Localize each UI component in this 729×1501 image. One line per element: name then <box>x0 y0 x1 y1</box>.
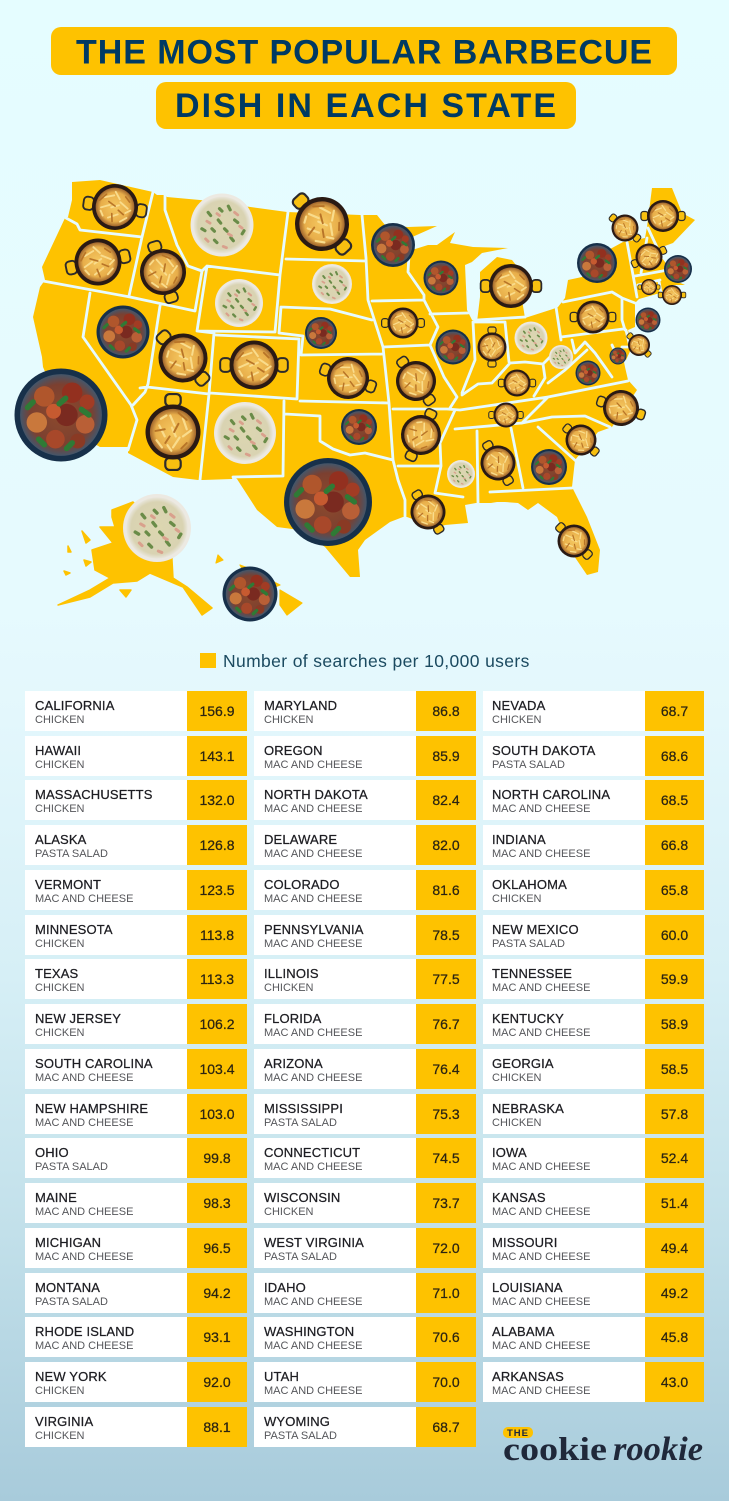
row: South Carolina: 103.4 <box>199 1061 235 1077</box>
row: Arizona <box>254 1049 476 1089</box>
row: Washington <box>254 1317 476 1357</box>
row: Mississippi: 75.3 <box>432 1106 460 1122</box>
row: Maine: MAINE <box>35 1190 77 1205</box>
logo: The Cookie Rookie: rookie <box>613 1431 703 1468</box>
row: Georgia: CHICKEN <box>492 1072 542 1084</box>
logo: The Cookie Rookie: THE <box>507 1428 528 1439</box>
row: New Mexico <box>483 915 704 955</box>
row: Indiana <box>483 825 704 865</box>
row: Michigan: MAC AND CHEESE <box>35 1251 133 1263</box>
row: Nebraska: 57.8 <box>661 1106 688 1122</box>
row: South Dakota: 68.6 <box>661 748 688 764</box>
row: Illinois <box>254 959 476 999</box>
row: Nebraska: CHICKEN <box>492 1117 542 1129</box>
row: Vermont: VERMONT <box>35 877 101 892</box>
row: Idaho: MAC AND CHEESE <box>264 1296 362 1308</box>
dish: Delaware mac and cheese <box>620 326 658 364</box>
dish: Idaho mac and cheese <box>131 235 195 309</box>
row: Alabama: 45.8 <box>661 1329 688 1345</box>
row: Indiana: 66.8 <box>661 837 688 853</box>
row: Ohio: PASTA SALAD <box>35 1161 108 1173</box>
dish: Indiana mac and cheese <box>478 327 506 367</box>
row: Hawaii: 143.1 <box>199 748 235 764</box>
row: Oregon: MAC AND CHEESE <box>264 759 362 771</box>
dish: Illinois chicken <box>436 330 470 364</box>
dish: Nebraska chicken <box>305 317 337 349</box>
row: Pennsylvania: 78.5 <box>432 927 460 943</box>
map: Alaska <box>58 502 212 615</box>
dish: New Jersey chicken <box>636 308 660 332</box>
dish: West Virginia pasta salad <box>549 345 573 369</box>
title line 2: DISH IN EACH STATE <box>175 87 556 125</box>
row: West Virginia: 72.0 <box>432 1240 460 1256</box>
row: Idaho: IDAHO <box>264 1280 306 1295</box>
row: Kansas: KANSAS <box>492 1190 546 1205</box>
row: Hawaii: CHICKEN <box>35 759 85 771</box>
row: West Virginia: PASTA SALAD <box>264 1251 337 1263</box>
row: Washington: WASHINGTON <box>264 1324 354 1339</box>
row: Wisconsin: CHICKEN <box>264 1206 314 1218</box>
row: Connecticut: MAC AND CHEESE <box>264 1161 362 1173</box>
data table column 3 <box>483 691 704 1402</box>
row: North Carolina: MAC AND CHEESE <box>492 803 590 815</box>
row: Vermont: MAC AND CHEESE <box>35 893 133 905</box>
row: Oregon <box>254 736 476 776</box>
row: Massachusetts: CHICKEN <box>35 803 85 815</box>
row: Rhode Island: 93.1 <box>203 1329 231 1345</box>
row: New Hampshire: 103.0 <box>199 1106 235 1122</box>
row: Rhode Island: RHODE ISLAND <box>35 1324 134 1339</box>
row: Kansas: 51.4 <box>661 1195 688 1211</box>
dish: Michigan mac and cheese <box>481 264 541 308</box>
row: Wyoming: 68.7 <box>432 1419 460 1435</box>
row: Tennessee <box>483 959 704 999</box>
row: South Dakota: SOUTH DAKOTA <box>492 743 595 758</box>
row: Kentucky <box>483 1004 704 1044</box>
row: Connecticut: 74.5 <box>432 1150 460 1166</box>
dish: Arizona mac and cheese <box>146 394 200 470</box>
row: Delaware: 82.0 <box>432 837 460 853</box>
row: Alaska: 126.8 <box>199 837 235 853</box>
dish: Oklahoma chicken <box>341 409 377 445</box>
row: Oklahoma: CHICKEN <box>492 893 542 905</box>
dish: Maryland chicken <box>610 348 626 364</box>
map and title graphic <box>14 27 695 622</box>
row: Nebraska <box>483 1094 704 1134</box>
row: Maine <box>25 1183 247 1223</box>
dish: New York chicken <box>577 243 617 283</box>
row: South Carolina: SOUTH CAROLINA <box>35 1056 153 1071</box>
row: Massachusetts <box>25 780 247 820</box>
row: Maryland: CHICKEN <box>264 714 314 726</box>
row: Vermont <box>25 870 247 910</box>
row: Wyoming: WYOMING <box>264 1414 330 1429</box>
row: Washington: MAC AND CHEESE <box>264 1340 362 1352</box>
row: Virginia <box>25 1407 247 1447</box>
row: Wisconsin: WISCONSIN <box>264 1190 340 1205</box>
dish: Tennessee mac and cheese <box>489 402 523 428</box>
row: Florida: FLORIDA <box>264 1011 321 1026</box>
row: Kentucky: KENTUCKY <box>492 1011 564 1026</box>
dish: Maine mac and cheese <box>641 200 685 232</box>
dish: Ohio pasta salad <box>514 322 548 354</box>
dish: Hawaii chicken <box>222 566 278 622</box>
dish: Alaska pasta salad <box>123 494 191 562</box>
row: Tennessee: TENNESSEE <box>492 966 572 981</box>
row: Louisiana: LOUISIANA <box>492 1280 563 1295</box>
row: Michigan <box>25 1228 247 1268</box>
row: Illinois: ILLINOIS <box>264 966 319 981</box>
row: Wyoming: PASTA SALAD <box>264 1430 337 1442</box>
row: New Jersey: 106.2 <box>199 1016 235 1032</box>
dish: Connecticut mac and cheese <box>638 279 660 295</box>
row: Utah <box>254 1362 476 1402</box>
dish: Wyoming pasta salad <box>215 279 263 327</box>
row: Wisconsin <box>254 1183 476 1223</box>
row: Idaho <box>254 1273 476 1313</box>
row: Maryland: MARYLAND <box>264 698 337 713</box>
row: California: 156.9 <box>199 703 235 719</box>
row: Nebraska: NEBRASKA <box>492 1101 564 1116</box>
row: Kansas <box>483 1183 704 1223</box>
dish: Utah mac and cheese <box>142 317 224 399</box>
row: Nevada: NEVADA <box>492 698 545 713</box>
row: South Carolina: MAC AND CHEESE <box>35 1072 133 1084</box>
row: Missouri: 49.4 <box>661 1240 688 1256</box>
row: Wyoming <box>254 1407 476 1447</box>
row: Rhode Island: MAC AND CHEESE <box>35 1340 133 1352</box>
row: Colorado <box>254 870 476 910</box>
map: contiguous US silhouette with state borders <box>33 180 695 577</box>
dish: Massachusetts chicken <box>664 255 692 283</box>
dish: Pennsylvania mac and cheese <box>570 300 616 334</box>
dish: Kansas mac and cheese <box>314 348 382 408</box>
row: Maine: 98.3 <box>203 1195 231 1211</box>
row: North Carolina: NORTH CAROLINA <box>492 787 610 802</box>
row: New Mexico: 60.0 <box>661 927 688 943</box>
row: Utah: MAC AND CHEESE <box>264 1385 362 1397</box>
row: Indiana: MAC AND CHEESE <box>492 848 590 860</box>
row: Iowa: IOWA <box>492 1145 527 1160</box>
row: Maryland <box>254 691 476 731</box>
dish: Virginia chicken <box>576 360 600 386</box>
logo: The Cookie Rookie: cookie <box>503 1432 607 1468</box>
row: West Virginia <box>254 1228 476 1268</box>
row: Missouri: MAC AND CHEESE <box>492 1251 590 1263</box>
row: North Dakota <box>254 780 476 820</box>
row: New Jersey <box>25 1004 247 1044</box>
title line 1: THE MOST POPULAR BARBECUE <box>76 34 652 72</box>
row: Washington: 70.6 <box>432 1329 460 1345</box>
row: Arkansas <box>483 1362 704 1402</box>
row: Kansas: MAC AND CHEESE <box>492 1206 590 1218</box>
row: Alabama: ALABAMA <box>492 1324 554 1339</box>
dish: Arkansas mac and cheese <box>391 402 451 468</box>
row: New Hampshire <box>25 1094 247 1134</box>
dish: South Carolina mac and cheese <box>555 414 607 466</box>
dish: Missouri mac and cheese <box>384 347 448 415</box>
row: Minnesota: CHICKEN <box>35 938 85 950</box>
dish: North Dakota mac and cheese <box>277 178 367 270</box>
dish: Alabama mac and cheese <box>471 433 525 493</box>
row: Missouri <box>483 1228 704 1268</box>
dish: New Hampshire mac and cheese <box>626 237 672 277</box>
row: Georgia: GEORGIA <box>492 1056 554 1071</box>
data table column 2 <box>254 691 476 1447</box>
row: Nevada <box>483 691 704 731</box>
row: Delaware: DELAWARE <box>264 832 337 847</box>
dish: Texas chicken <box>284 458 372 546</box>
data table column 1 <box>25 691 247 1447</box>
row: Pennsylvania <box>254 915 476 955</box>
row: South Dakota: PASTA SALAD <box>492 759 565 771</box>
dish: Kentucky mac and cheese <box>498 370 536 396</box>
dish: California chicken <box>14 368 107 462</box>
row: Colorado: COLORADO <box>264 877 340 892</box>
row: Montana: PASTA SALAD <box>35 1296 108 1308</box>
row: Hawaii <box>25 736 247 776</box>
row: South Dakota <box>483 736 704 776</box>
row: Connecticut <box>254 1138 476 1178</box>
dish: Colorado mac and cheese <box>220 340 288 390</box>
dish: Washington mac and cheese <box>80 180 150 234</box>
row: Ohio <box>25 1138 247 1178</box>
row: Utah: UTAH <box>264 1369 299 1384</box>
row: Colorado: MAC AND CHEESE <box>264 893 362 905</box>
dish: North Carolina mac and cheese <box>592 383 650 433</box>
dish: New Mexico pasta salad <box>214 402 276 464</box>
row: Arkansas: MAC AND CHEESE <box>492 1385 590 1397</box>
row: Delaware <box>254 825 476 865</box>
row: Vermont: 123.5 <box>199 882 235 898</box>
row: North Dakota: MAC AND CHEESE <box>264 803 362 815</box>
row: Minnesota: 113.8 <box>200 927 234 943</box>
row: Alaska: ALASKA <box>35 832 86 847</box>
row: Georgia: 58.5 <box>661 1061 688 1077</box>
row: Michigan: 96.5 <box>203 1240 231 1256</box>
dish: Louisiana mac and cheese <box>400 482 456 542</box>
row: Rhode Island <box>25 1317 247 1357</box>
row: New York: 92.0 <box>203 1374 231 1390</box>
row: South Carolina <box>25 1049 247 1089</box>
row: Ohio: 99.8 <box>203 1150 231 1166</box>
row: Louisiana: 49.2 <box>661 1285 688 1301</box>
row: Massachusetts: 132.0 <box>199 792 235 808</box>
row: Nevada: 68.7 <box>661 703 688 719</box>
row: Mississippi: MISSISSIPPI <box>264 1101 343 1116</box>
dish: Mississippi pasta salad <box>447 460 475 488</box>
row: Illinois: CHICKEN <box>264 982 314 994</box>
dish: Florida mac and cheese <box>546 513 602 569</box>
row: Virginia: CHICKEN <box>35 1430 85 1442</box>
dish: Vermont mac and cheese <box>602 206 648 250</box>
row: Pennsylvania: MAC AND CHEESE <box>264 938 362 950</box>
row: Arizona: 76.4 <box>432 1061 460 1077</box>
row: Kentucky: MAC AND CHEESE <box>492 1027 590 1039</box>
row: Hawaii: HAWAII <box>35 743 81 758</box>
row: North Dakota: NORTH DAKOTA <box>264 787 368 802</box>
dish: Montana pasta salad <box>190 194 254 256</box>
row: Georgia <box>483 1049 704 1089</box>
row: Oregon: OREGON <box>264 743 323 758</box>
row: Iowa: 52.4 <box>661 1150 688 1166</box>
row: Virginia: VIRGINIA <box>35 1414 93 1429</box>
row: Florida: 76.7 <box>432 1016 460 1032</box>
row: Indiana: INDIANA <box>492 832 546 847</box>
row: Alaska: PASTA SALAD <box>35 848 108 860</box>
dish: South Dakota pasta salad <box>312 264 352 304</box>
row: Maine: MAC AND CHEESE <box>35 1206 133 1218</box>
row: Minnesota: MINNESOTA <box>35 922 113 937</box>
dish: Oregon mac and cheese <box>61 232 135 292</box>
dish: Rhode Island mac and cheese <box>658 285 686 305</box>
row: New Mexico: PASTA SALAD <box>492 938 565 950</box>
row: Texas: CHICKEN <box>35 982 85 994</box>
row: North Carolina <box>483 780 704 820</box>
row: Oregon: 85.9 <box>432 748 460 764</box>
row: Nevada: CHICKEN <box>492 714 542 726</box>
row: Maryland: 86.8 <box>432 703 460 719</box>
row: New Hampshire: NEW HAMPSHIRE <box>35 1101 148 1116</box>
row: New Jersey: CHICKEN <box>35 1027 85 1039</box>
row: California <box>25 691 247 731</box>
row: Mississippi: PASTA SALAD <box>264 1117 337 1129</box>
row: Massachusetts: MASSACHUSETTS <box>35 787 153 802</box>
row: Florida <box>254 1004 476 1044</box>
dish: Wisconsin chicken <box>424 260 458 296</box>
row: Oklahoma <box>483 870 704 910</box>
row: California: CHICKEN <box>35 714 85 726</box>
row: Mississippi <box>254 1094 476 1134</box>
row: Tennessee: MAC AND CHEESE <box>492 982 590 994</box>
row: New York: CHICKEN <box>35 1385 85 1397</box>
row: California: CALIFORNIA <box>35 698 115 713</box>
row: Montana <box>25 1273 247 1313</box>
row: New Mexico: NEW MEXICO <box>492 922 579 937</box>
dish: Minnesota chicken <box>371 223 415 267</box>
row: Arkansas: ARKANSAS <box>492 1369 564 1384</box>
row: New Jersey: NEW JERSEY <box>35 1011 121 1026</box>
row: Iowa <box>483 1138 704 1178</box>
dish: Iowa mac and cheese <box>382 308 424 338</box>
row: Illinois: 77.5 <box>432 971 460 987</box>
legend: searches per 10,000 users: Number of searches per 10,000 users <box>223 651 530 671</box>
row: West Virginia: WEST VIRGINIA <box>264 1235 364 1250</box>
row: Louisiana <box>483 1273 704 1313</box>
row: Utah: 70.0 <box>432 1374 460 1390</box>
row: Iowa: MAC AND CHEESE <box>492 1161 590 1173</box>
row: Louisiana: MAC AND CHEESE <box>492 1296 590 1308</box>
dish: Georgia chicken <box>531 449 567 485</box>
row: Alabama: MAC AND CHEESE <box>492 1340 590 1352</box>
row: New Hampshire: MAC AND CHEESE <box>35 1117 133 1129</box>
row: Missouri: MISSOURI <box>492 1235 557 1250</box>
row: Arizona: ARIZONA <box>264 1056 323 1071</box>
row: North Dakota: 82.4 <box>432 792 460 808</box>
row: Oklahoma: OKLAHOMA <box>492 877 567 892</box>
row: Arkansas: 43.0 <box>661 1374 688 1390</box>
row: New York: NEW YORK <box>35 1369 107 1384</box>
row: Alabama <box>483 1317 704 1357</box>
row: Montana: MONTANA <box>35 1280 100 1295</box>
row: New York <box>25 1362 247 1402</box>
map: Hawaii <box>216 555 302 615</box>
row: Wisconsin: 73.7 <box>432 1195 460 1211</box>
dish: Nevada chicken <box>96 306 150 358</box>
row: Florida: MAC AND CHEESE <box>264 1027 362 1039</box>
row: Colorado: 81.6 <box>432 882 460 898</box>
row: Ohio: OHIO <box>35 1145 69 1160</box>
row: Tennessee: 59.9 <box>661 971 688 987</box>
row: Texas: 113.3 <box>200 971 234 987</box>
row: North Carolina: 68.5 <box>661 792 688 808</box>
row: Idaho: 71.0 <box>432 1285 460 1301</box>
row: Alaska <box>25 825 247 865</box>
row: Pennsylvania: PENNSYLVANIA <box>264 922 364 937</box>
row: Montana: 94.2 <box>203 1285 231 1301</box>
row: Connecticut: CONNECTICUT <box>264 1145 360 1160</box>
row: Kentucky: 58.9 <box>661 1016 688 1032</box>
row: Texas <box>25 959 247 999</box>
row: Virginia: 88.1 <box>203 1419 231 1435</box>
row: Texas: TEXAS <box>35 966 78 981</box>
row: Michigan: MICHIGAN <box>35 1235 101 1250</box>
row: Arizona: MAC AND CHEESE <box>264 1072 362 1084</box>
row: Minnesota <box>25 915 247 955</box>
row: Delaware: MAC AND CHEESE <box>264 848 362 860</box>
row: Oklahoma: 65.8 <box>661 882 688 898</box>
